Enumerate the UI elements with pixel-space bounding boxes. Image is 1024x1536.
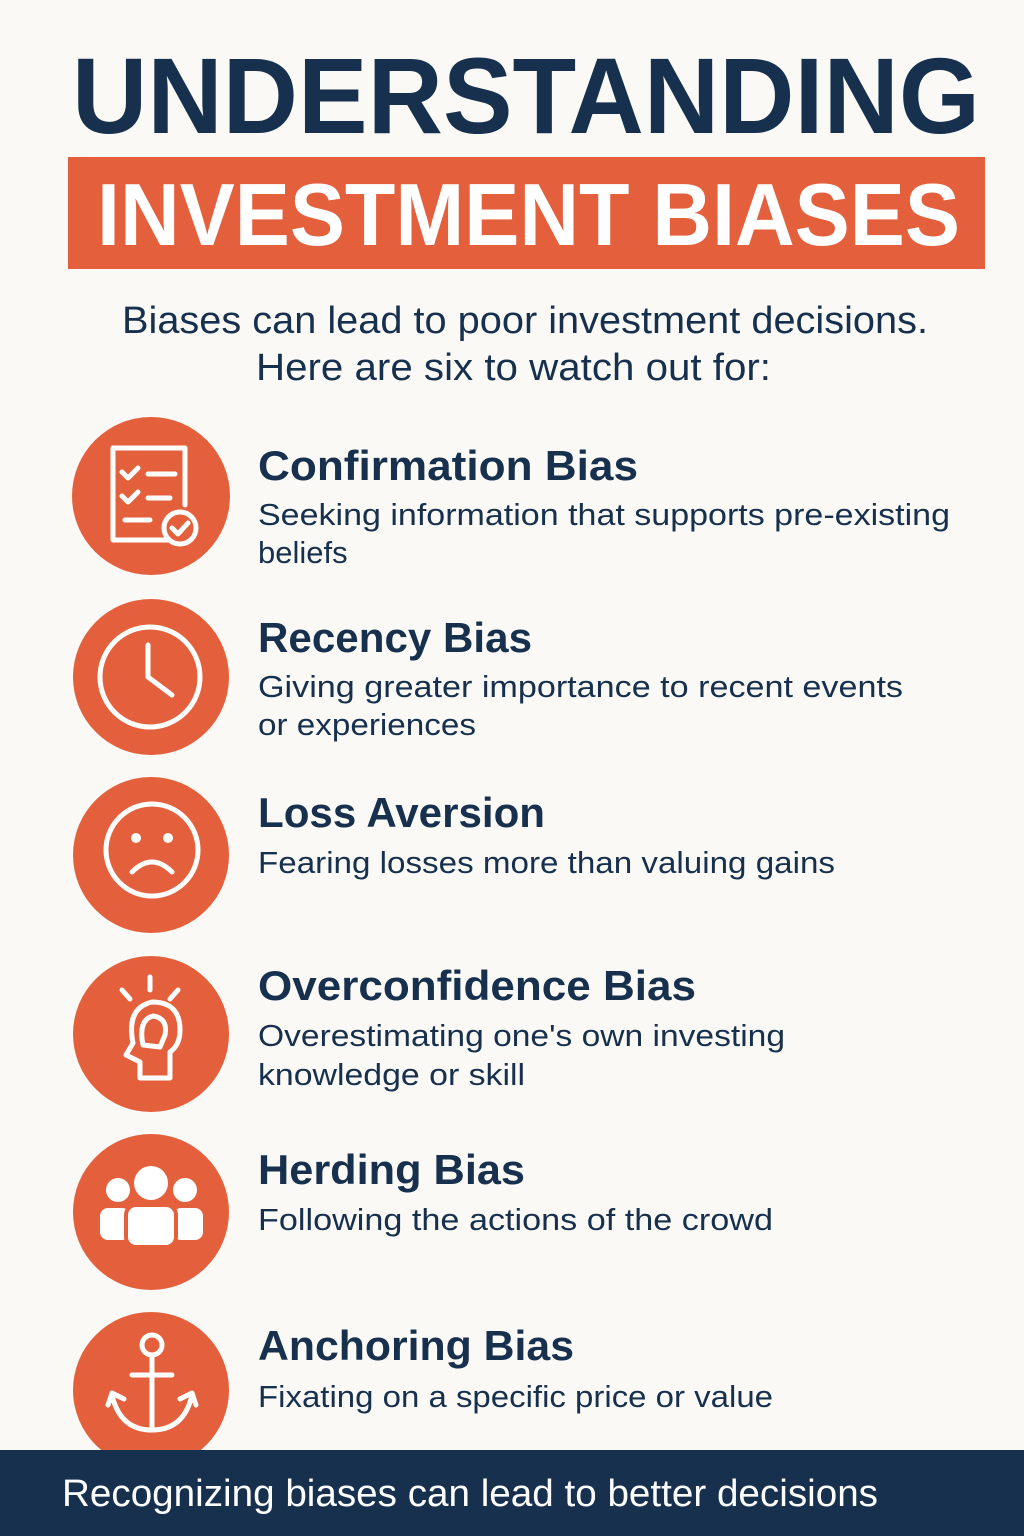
footer	[0, 1450, 1024, 1536]
description	[258, 669, 903, 742]
description: knowledge or skill	[258, 1057, 525, 1092]
item: anchoring bias	[73, 1312, 773, 1468]
item: herding bias	[73, 1134, 773, 1290]
description: Seeking information that supports pre-existing	[258, 497, 950, 532]
description	[258, 1018, 785, 1092]
heading: Herding Bias	[258, 1146, 525, 1193]
icon: group of people	[73, 1134, 229, 1290]
subtitle: Here are six to watch out for:	[256, 347, 771, 389]
item: overconfidence bias	[73, 956, 785, 1112]
subtitle	[122, 300, 928, 389]
description: Fearing losses more than valuing gains	[258, 845, 835, 880]
description	[258, 497, 950, 570]
description: or experiences	[258, 707, 476, 742]
icon: clock	[73, 599, 229, 755]
subtitle: Biases can lead to poor investment decisions.	[122, 300, 928, 342]
banner: INVESTMENT BIASES	[97, 165, 960, 264]
footer: Recognizing biases can lead to better decisions	[62, 1473, 878, 1515]
icon: sad face	[73, 777, 229, 933]
description: beliefs	[258, 535, 348, 570]
heading: Recency Bias	[258, 614, 532, 661]
description: Giving greater importance to recent events	[258, 669, 903, 704]
heading: Overconfidence Bias	[258, 962, 696, 1009]
title: UNDERSTANDING	[72, 35, 980, 156]
heading: Anchoring Bias	[258, 1322, 574, 1369]
icon: anchor	[73, 1312, 229, 1468]
icon: head with lightbulb	[73, 956, 229, 1112]
description: Overestimating one's own investing	[258, 1018, 785, 1053]
heading: Loss Aversion	[258, 789, 545, 836]
description: Following the actions of the crowd	[258, 1202, 773, 1237]
item: loss aversion	[73, 777, 835, 933]
heading: Confirmation Bias	[258, 442, 638, 489]
icon: checklist	[72, 417, 230, 575]
item: recency bias	[73, 599, 903, 755]
description: Fixating on a specific price or value	[258, 1379, 773, 1414]
item: confirmation bias	[72, 417, 950, 575]
